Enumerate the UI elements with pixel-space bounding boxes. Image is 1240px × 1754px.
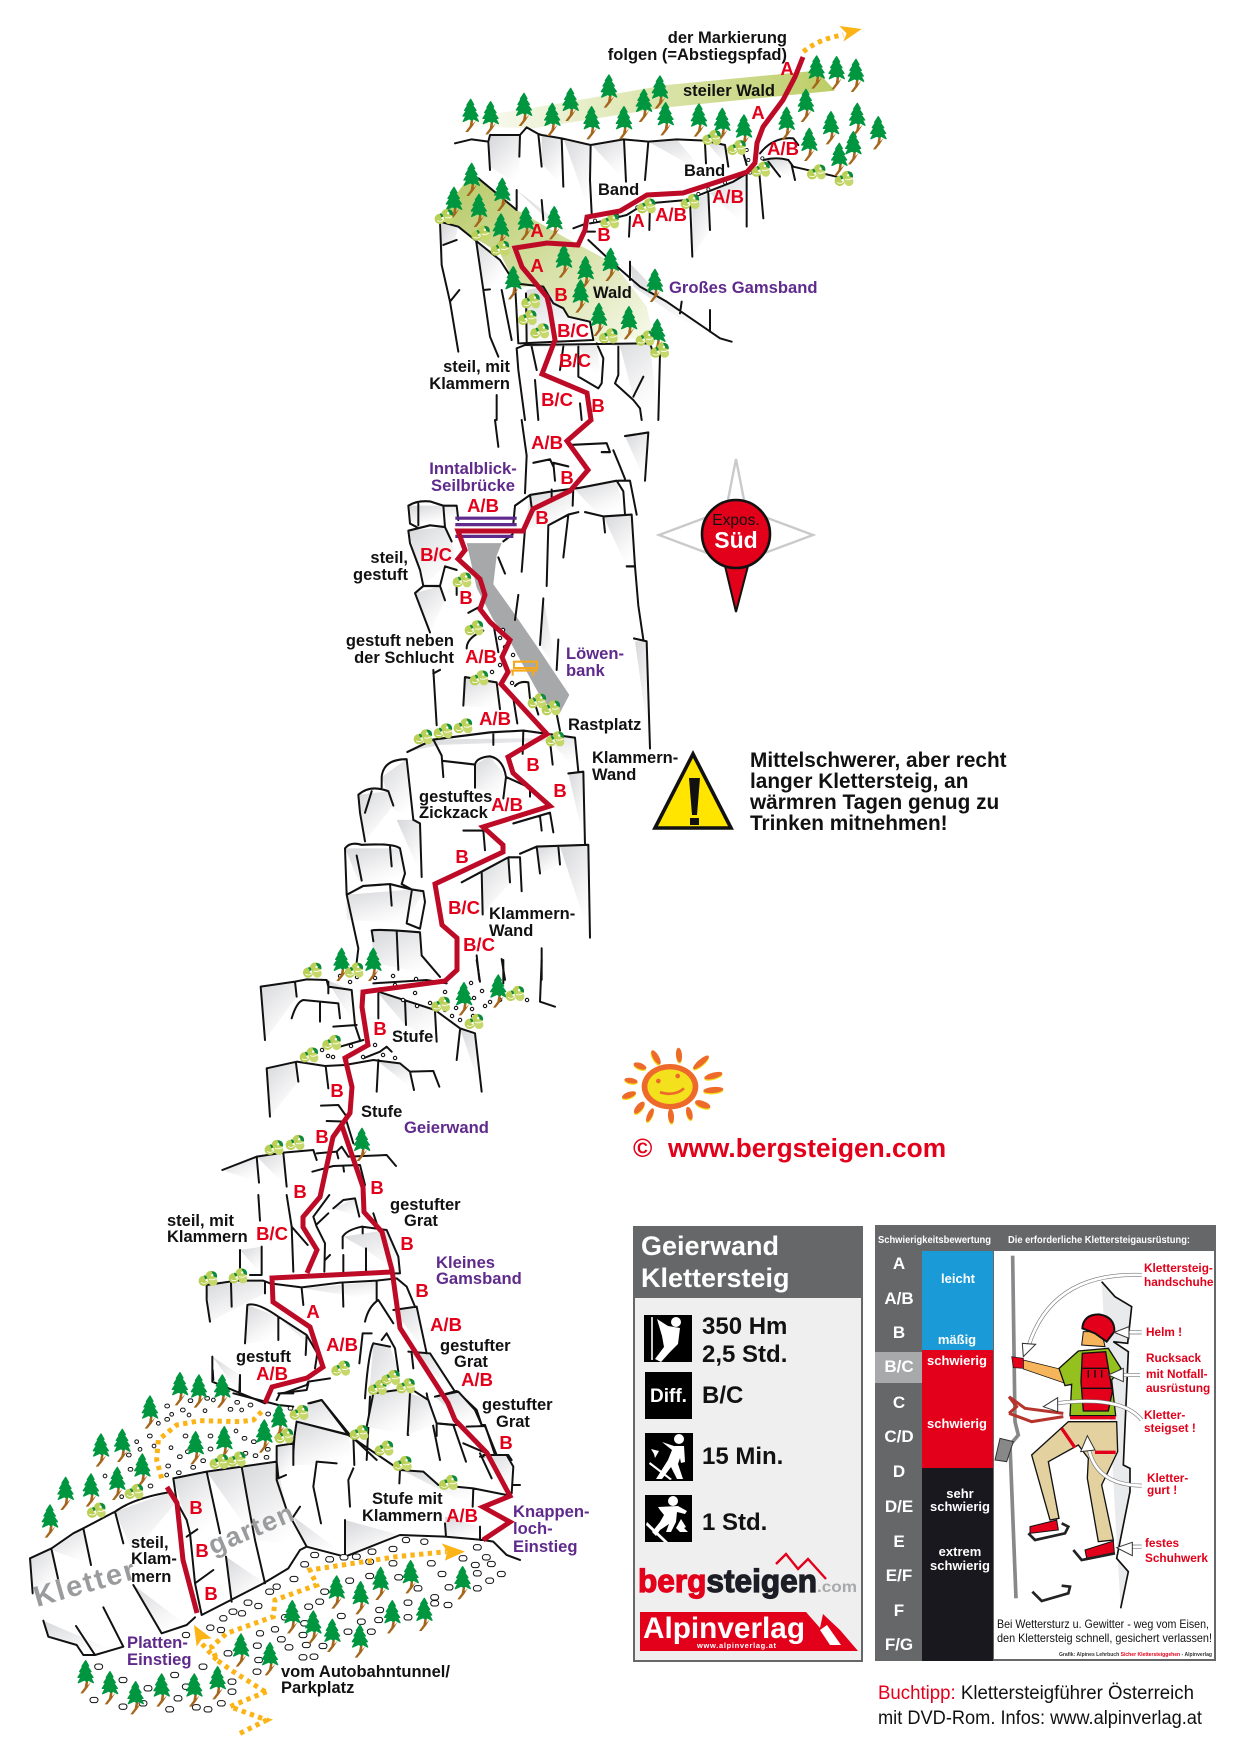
note: steil, Klammern: Klam- <box>131 1550 177 1568</box>
icon: difficulty badge: Diff. <box>650 1386 687 1407</box>
note: Klammern-Wand upper: Wand <box>592 766 636 784</box>
grade labels: B <box>195 1540 209 1561</box>
grade labels: B <box>370 1177 384 1198</box>
note: der Markierung folgen: folgen (=Abstiegspfad) <box>608 46 787 64</box>
icon: ascent walker <box>645 1433 693 1481</box>
equipment label: gloves: handschuhe <box>1144 1275 1214 1289</box>
note: steiler Wald: steiler Wald <box>683 82 775 100</box>
grade labels: B/C <box>448 897 480 918</box>
grade labels: A/B <box>467 495 499 516</box>
equipment label: helmet: Helm ! <box>1146 1325 1182 1339</box>
crag name: Klettergarten <box>30 1497 300 1614</box>
note: gestuftes Zickzack: gestuftes <box>419 788 492 806</box>
text block: warning note: Trinken mitnehmen! <box>750 812 948 835</box>
place name: Löwenbank: bank <box>566 661 606 680</box>
grade labels: B/C <box>256 1223 288 1244</box>
equipment label: gloves: Klettersteig- <box>1144 1261 1213 1275</box>
grade labels: B <box>330 1080 344 1101</box>
route: Kleines Gamsband traverse and lower left branch <box>265 1272 392 1403</box>
difficulty band: sehr / extrem schwierig: sehr <box>946 1486 974 1501</box>
note: Klammern-Wand lower: Klammern- <box>489 905 575 923</box>
difficulty band: schwierig: schwierig <box>927 1416 987 1431</box>
note: Stufe upper: Stufe <box>392 1028 433 1046</box>
difficulty band: sehr / extrem schwierig: extrem <box>939 1544 981 1559</box>
difficulty band: schwierig <box>922 1350 993 1468</box>
grade labels: A <box>780 58 794 79</box>
equipment illustration panel <box>994 1251 1214 1659</box>
difficulty band: sehr / extrem schwierig <box>922 1468 993 1661</box>
grade labels: A <box>530 220 544 241</box>
equipment label: via ferrata set: Kletter- <box>1144 1408 1185 1422</box>
rock face: summit cliffs <box>440 127 837 420</box>
icon: compass exposure Süd: Süd <box>714 527 758 553</box>
grade labels: A/B <box>326 1334 358 1355</box>
icon: sun logo <box>621 1047 724 1125</box>
grade labels: B/C <box>541 389 573 410</box>
grade column: D <box>893 1462 905 1481</box>
panel: route topo map <box>30 26 886 1733</box>
note: gestuft neben der Schlucht: gestuft neben <box>346 632 454 650</box>
icon: descent walker <box>645 1495 692 1542</box>
logo: bergsteigen.com: .com <box>817 1579 857 1596</box>
note: Rastplatz: Rastplatz <box>568 716 641 734</box>
grade column: B/C <box>884 1357 914 1376</box>
logo: bergsteigen.com <box>638 1554 857 1599</box>
grade column: B <box>893 1323 905 1342</box>
grade labels: A/B <box>531 432 563 453</box>
grade labels: B <box>560 467 574 488</box>
difficulty highlight B/C <box>875 1352 922 1383</box>
equipment label: backpack: ausrüstung <box>1146 1381 1210 1395</box>
copyright web address: © <box>633 1133 652 1163</box>
equipment label: footwear: Schuhwerk <box>1145 1551 1208 1565</box>
logo: Alpinverlag: www.alpinverlag.at <box>696 1641 776 1650</box>
grade labels: B/C <box>463 934 495 955</box>
Inntalblick rope bridge <box>455 518 517 536</box>
difficulty band: leicht / mäßig: mäßig <box>938 1332 976 1347</box>
grade labels: B <box>535 507 549 528</box>
copyright web address: www.bergsteigen.com <box>667 1133 946 1163</box>
grade labels: B <box>204 1583 218 1604</box>
grade labels: B <box>315 1126 329 1147</box>
equipment label: backpack: mit Notfall- <box>1146 1367 1208 1381</box>
forest band: steiler Wald <box>447 71 835 128</box>
scree pebbles <box>93 1398 503 1709</box>
text block: warning note: wärmren Tagen genug zu <box>749 791 999 814</box>
equipment arrows <box>1022 1275 1142 1556</box>
grade column: C <box>893 1393 905 1412</box>
stat: difficulty: B/C <box>702 1382 743 1409</box>
note: gestufter Grat 3: Grat <box>496 1413 530 1431</box>
note: gestufter Grat 3: gestufter <box>482 1396 553 1414</box>
grade column: A <box>893 1254 905 1273</box>
note: gestufter Grat 2: gestufter <box>440 1337 511 1355</box>
rock face: Geierwand <box>207 960 555 1460</box>
note: vom Autobahntunnel / Parkplatz: Parkplatz <box>281 1679 354 1697</box>
icon: climber height and time <box>644 1315 692 1362</box>
note: Stufe mit Klammern: Stufe mit <box>372 1490 443 1508</box>
grade labels: B <box>373 1018 387 1039</box>
note: Stufe lower: Stufe <box>361 1103 402 1121</box>
note: steil, gestuft: steil, <box>370 549 408 567</box>
difficulty band: leicht / mäßig <box>922 1251 993 1350</box>
place name: Großes Gamsband: Großes Gamsband <box>669 278 817 297</box>
header: Klettersteigausrüstung: Die erforderliche Klettersteigausrüstung: <box>1008 1234 1190 1246</box>
grade column: C/D <box>884 1427 914 1446</box>
grade labels: B <box>293 1181 307 1202</box>
ledge pebbles <box>322 150 762 1060</box>
note: Wald: Wald <box>593 284 632 302</box>
place name: Geierwand: Geierwand <box>404 1118 489 1137</box>
difficulty band: sehr / extrem schwierig: schwierig <box>930 1558 990 1573</box>
grade column: F/G <box>885 1635 913 1654</box>
grade labels: B <box>553 780 567 801</box>
place name: Kleines Gamsband: Gamsband <box>436 1269 522 1288</box>
grade column: E <box>893 1532 905 1551</box>
note: der Markierung folgen: der Markierung <box>668 29 787 47</box>
icon: compass exposure Süd: Expos. <box>712 512 760 529</box>
grade labels: B <box>189 1497 203 1518</box>
grade labels: A <box>306 1301 320 1322</box>
grade labels: B <box>459 587 473 608</box>
grade labels: A/B <box>767 138 799 159</box>
grade labels: B/C <box>559 350 591 371</box>
grade labels: A <box>530 255 544 276</box>
note: steil, mit Klammern: steil, mit <box>443 358 511 376</box>
grade labels: A/B <box>465 646 497 667</box>
text block: storm warning: den Klettersteig schnell, gesichert verlassen! <box>997 1631 1212 1645</box>
grade labels: A/B <box>430 1314 462 1335</box>
grade labels: B <box>400 1233 414 1254</box>
panel header: title: Geierwand <box>641 1231 779 1261</box>
note: Band lower: Band <box>598 181 639 199</box>
descent path arrow <box>803 26 862 52</box>
equipment label: harness: Kletter- <box>1147 1471 1188 1485</box>
icon: compass exposure Süd <box>659 459 813 612</box>
grade labels: A/B <box>479 708 511 729</box>
rock face: middle wall <box>345 420 650 980</box>
stat: height and duration: 2,5 Std. <box>702 1341 787 1368</box>
route: main climb line upper <box>303 57 803 1273</box>
grade column <box>884 1254 914 1654</box>
Löwenbank bench icon <box>511 662 537 676</box>
panel: route facts <box>633 1226 863 1661</box>
grade labels: B <box>526 754 540 775</box>
grade labels: B <box>554 284 568 305</box>
grade labels: B <box>499 1432 513 1453</box>
grade labels: B/C <box>420 544 452 565</box>
equipment label: footwear: festes <box>1145 1536 1180 1550</box>
grade labels: A/B <box>712 186 744 207</box>
note: steil, mit Klammern lower: steil, mit <box>167 1212 234 1230</box>
note: gestuftes Zickzack: Zickzack <box>419 804 489 822</box>
grade column: A/B <box>884 1289 914 1308</box>
stat: approach time: 15 Min. <box>702 1443 783 1470</box>
route: right branch via Grat <box>342 1126 510 1540</box>
forest slope: Großes Gamsband <box>440 173 653 342</box>
crag name: Klettergarten: Kletter <box>30 1554 141 1614</box>
text block: storm warning <box>997 1617 1212 1645</box>
note: Klammern-Wand lower: Wand <box>489 922 533 940</box>
note: steil, Klammern: mern <box>131 1568 171 1586</box>
text block: book tip: Buchtipp: Klettersteigführer Österreich <box>878 1683 1194 1704</box>
logo: Alpinverlag <box>640 1612 858 1651</box>
grade column: E/F <box>886 1566 912 1585</box>
logo: bergsteigen.com: bergsteigen <box>638 1563 817 1599</box>
note: vom Autobahntunnel / Parkplatz: vom Autobahntunnel/ <box>281 1663 450 1681</box>
text block: book tip: mit DVD-Rom. Infos: www.alpinverlag.at <box>878 1708 1203 1729</box>
grade column: F <box>894 1601 904 1620</box>
note: steil, mit Klammern lower: Klammern <box>167 1228 248 1246</box>
place name: Knappenloch-Einstieg: loch- <box>513 1519 553 1538</box>
grade labels: B <box>415 1280 429 1301</box>
place name: Platten-Einstieg: Platten- <box>127 1633 188 1652</box>
note: Stufe mit Klammern: Klammern <box>362 1507 443 1525</box>
place name: Löwenbank: Löwen- <box>566 644 624 663</box>
illustration: climber on via ferrata <box>995 1256 1132 1608</box>
stat: descent time: 1 Std. <box>702 1509 767 1536</box>
note: gestufter Grat 1: Grat <box>404 1212 438 1230</box>
grade labels: A/B <box>491 794 523 815</box>
note: steil, mit Klammern: Klammern <box>429 375 510 393</box>
grade labels: B <box>455 846 469 867</box>
icon: warning triangle <box>655 754 731 828</box>
difficulty band: sehr / extrem schwierig: schwierig <box>930 1499 990 1514</box>
note: Klammern-Wand upper: Klammern- <box>592 749 678 767</box>
logo: Alpinverlag: Alpinverlag <box>643 1612 805 1645</box>
equipment label: backpack: Rucksack <box>1146 1351 1202 1365</box>
place name: Inntalblick-Seilbrücke: Seilbrücke <box>431 476 515 495</box>
stat: height and duration: 350 Hm <box>702 1313 787 1340</box>
difficulty band: leicht / mäßig: leicht <box>941 1271 976 1286</box>
text block: book tip <box>878 1683 1203 1729</box>
approach path: to Platten-Einstieg and Knappenloch <box>157 1410 465 1733</box>
bushes <box>87 130 853 1518</box>
grade labels <box>189 58 799 1604</box>
text block: storm warning: Bei Wettersturz u. Gewitter - weg vom Eisen, <box>997 1617 1209 1631</box>
panel header: title <box>633 1226 863 1298</box>
trees <box>42 56 886 1714</box>
place name: Inntalblick-Seilbrücke: Inntalblick- <box>429 459 517 478</box>
place name: Platten-Einstieg: Einstieg <box>127 1650 192 1669</box>
text block: warning note: langer Klettersteig, an <box>750 770 968 793</box>
text block: graphic credit: Grafik: Alpines Lehrbuch Sicher Klettersteiggehen - Alpinverlag <box>1059 1652 1213 1658</box>
header: Schwierigkeitsbewertung: Schwierigkeitsbewertung <box>878 1234 991 1246</box>
grade labels: A <box>631 210 645 231</box>
grade labels: B <box>597 224 611 245</box>
icon: difficulty badge <box>645 1372 692 1419</box>
rock face: Klettergarten <box>30 1370 520 1655</box>
grade labels: A/B <box>461 1369 493 1390</box>
crag name: Klettergarten: garten <box>204 1497 300 1561</box>
equipment label: harness: gurt ! <box>1147 1483 1177 1497</box>
text block: warning note: Mittelschwerer, aber recht <box>750 749 1007 772</box>
route: Platten-Einstieg start <box>167 1487 197 1613</box>
note: gestuft: gestuft <box>236 1348 292 1366</box>
grade labels: A/B <box>655 204 687 225</box>
grade column: D/E <box>885 1497 913 1516</box>
note: steil, gestuft: gestuft <box>353 566 408 584</box>
equipment label: via ferrata set: steigset ! <box>1144 1421 1196 1435</box>
note: gestufter Grat 2: Grat <box>454 1353 488 1371</box>
grade labels: B/C <box>557 320 589 341</box>
grade labels: A/B <box>446 1505 478 1526</box>
note: gestuft neben der Schlucht: der Schlucht <box>354 649 455 667</box>
place name: Knappenloch-Einstieg: Einstieg <box>513 1537 578 1556</box>
place name: Kleines Gamsband: Kleines <box>436 1253 495 1272</box>
note: gestufter Grat 1: gestufter <box>390 1196 461 1214</box>
panel: difficulty scale and equipment <box>875 1225 1216 1661</box>
note: steil, Klammern: steil, <box>131 1534 169 1552</box>
grade labels: A <box>751 102 765 123</box>
grade labels: A/B <box>256 1363 288 1384</box>
difficulty band: schwierig: schwierig <box>927 1353 987 1368</box>
note: Band upper: Band <box>684 162 725 180</box>
place name: Knappenloch-Einstieg: Knappen- <box>513 1502 590 1521</box>
grade labels: B <box>591 395 605 416</box>
panel header: title: Klettersteig <box>641 1263 790 1293</box>
